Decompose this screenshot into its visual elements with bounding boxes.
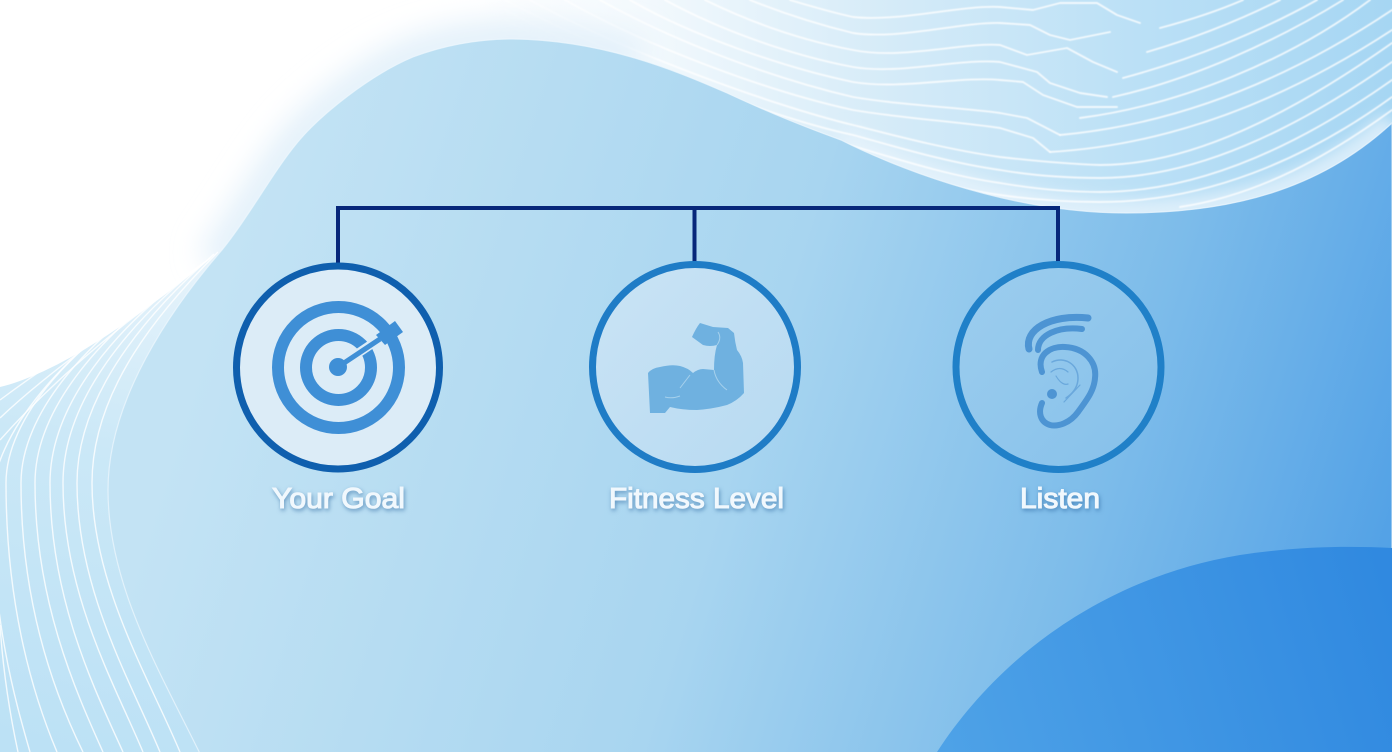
label: listen: Listen <box>1020 483 1100 515</box>
label: fitness level: Fitness Level <box>609 483 784 515</box>
icon: flexed arm <box>648 323 744 413</box>
circle: listen <box>956 264 1161 470</box>
connector tree <box>338 208 1058 265</box>
icon: ear with sound waves <box>1028 317 1095 425</box>
node: your goal <box>236 266 440 515</box>
background: bottom right corner shape <box>937 547 1392 752</box>
circle: your goal <box>236 266 440 469</box>
label: your goal: Your Goal <box>272 483 405 515</box>
left contour lines <box>0 252 218 752</box>
wave contour lines <box>505 0 1392 207</box>
node: fitness level <box>592 264 798 515</box>
icon: target with dart <box>278 307 403 428</box>
node: listen <box>956 264 1161 515</box>
background: top right wave band <box>470 0 1392 240</box>
background: left contour band <box>0 248 240 752</box>
background: soft halo along blob top <box>215 39 640 265</box>
circle: fitness level <box>592 264 798 470</box>
